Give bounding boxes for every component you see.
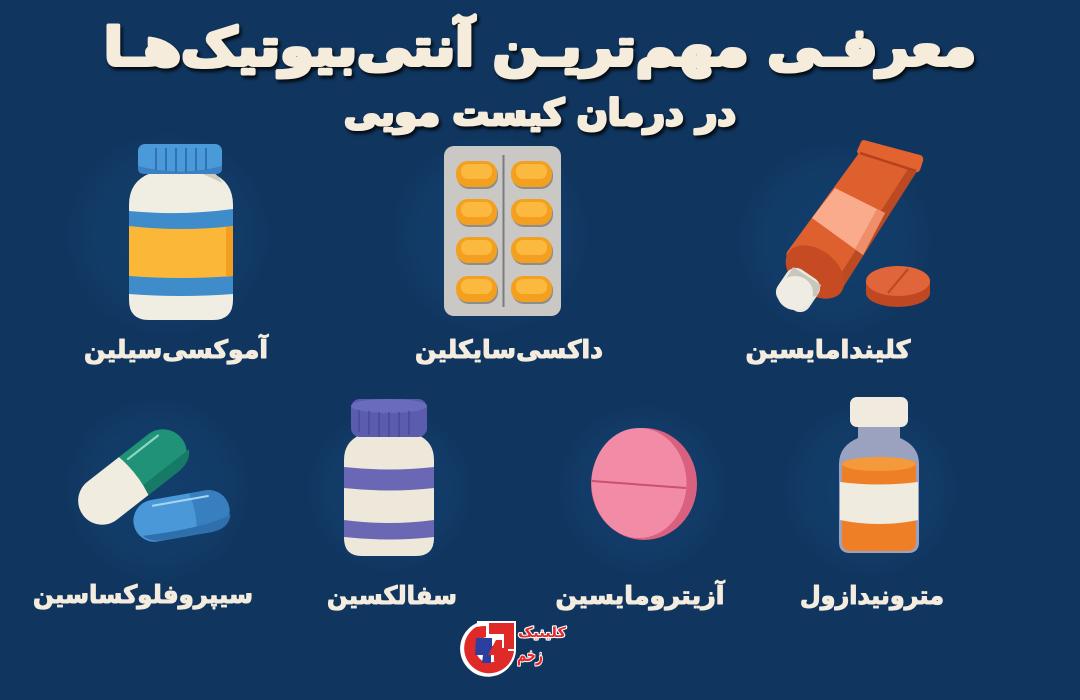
logo: zakhm clinic — [460, 621, 567, 677]
label: cephalexin: سفالکسین — [327, 581, 457, 611]
icon: cephalexin bottle — [344, 399, 434, 556]
icon: ciprofloxacin capsules — [68, 420, 233, 545]
icon: metronidazole vial — [839, 397, 919, 553]
label: clindamycin: کلیندامایسین — [746, 335, 911, 365]
logo: zakhm clinic: کلینیک — [518, 625, 567, 641]
icon: doxycycline blister pack — [444, 146, 561, 316]
label: ciprofloxacin: سیپروفلوکساسین — [33, 580, 253, 610]
label: metronidazole: مترونیدازول — [800, 581, 944, 611]
label: azithromycin: آزیترومایسین — [556, 580, 726, 611]
label: doxycycline: داکسی‌سایکلین — [415, 335, 603, 365]
subtitle: در درمان کیست مویی — [344, 93, 736, 134]
icon: amoxicillin bottle — [129, 144, 233, 320]
title: معرفـی مهم‌تریـن آنتی‌بیوتیک‌هـا — [104, 15, 976, 78]
icon: clindamycin ointment tube and tablet — [772, 140, 930, 316]
icon: azithromycin pink tablet — [591, 428, 697, 540]
label: amoxicillin: آموکسی‌سیلین — [84, 334, 269, 365]
logo: zakhm clinic: زخم — [517, 645, 543, 666]
